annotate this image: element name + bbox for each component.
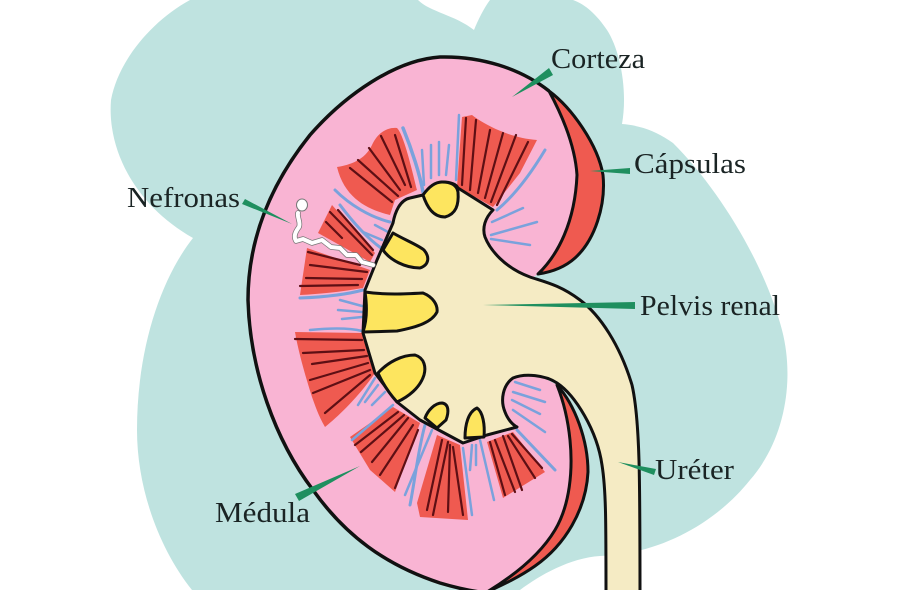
pelvis and ureter: [363, 182, 640, 590]
calyx 6: [465, 408, 484, 438]
label: Corteza: [512, 44, 646, 97]
pyramid 2: [457, 115, 537, 207]
calyx 4: [378, 355, 425, 402]
blue vessels: [300, 115, 555, 515]
pyramid 8: [487, 432, 545, 498]
calyces: [363, 182, 484, 438]
pyramid 6: [350, 407, 420, 492]
label: Nefronas: [127, 183, 292, 224]
label: Pelvis renal: Pelvis renal: [640, 291, 780, 322]
pyramid 5: [295, 332, 375, 427]
calyx 3: [363, 292, 437, 332]
label: Médula: [215, 466, 360, 529]
kidney body: cortex: [248, 57, 577, 590]
label: Uréter: Uréter: [655, 455, 735, 486]
renal pyramids: [295, 115, 545, 520]
upper capsule: [538, 91, 603, 274]
label: Uréter: [618, 455, 735, 486]
lower capsule: [487, 385, 588, 590]
label: Cápsulas: Cápsulas: [634, 149, 746, 180]
calyx 2: [383, 233, 428, 268]
label: Cápsulas: [590, 149, 746, 180]
pyramid 7: [417, 435, 468, 520]
label: Médula: Médula: [215, 498, 311, 529]
label: Pelvis renal: [483, 291, 780, 322]
pyramid 1: [337, 128, 417, 215]
kidney outer outline: [248, 57, 549, 590]
pyramid 4: [300, 248, 370, 295]
nephron: [295, 199, 373, 265]
calyx 1: [423, 182, 458, 217]
label: Corteza: Corteza: [551, 44, 646, 75]
background teal blob: [111, 0, 787, 590]
dark pyramid lines: [295, 118, 542, 515]
pyramid 3: [318, 205, 375, 262]
label: Nefronas: Nefronas: [127, 183, 240, 214]
calyx 5: [425, 403, 448, 428]
